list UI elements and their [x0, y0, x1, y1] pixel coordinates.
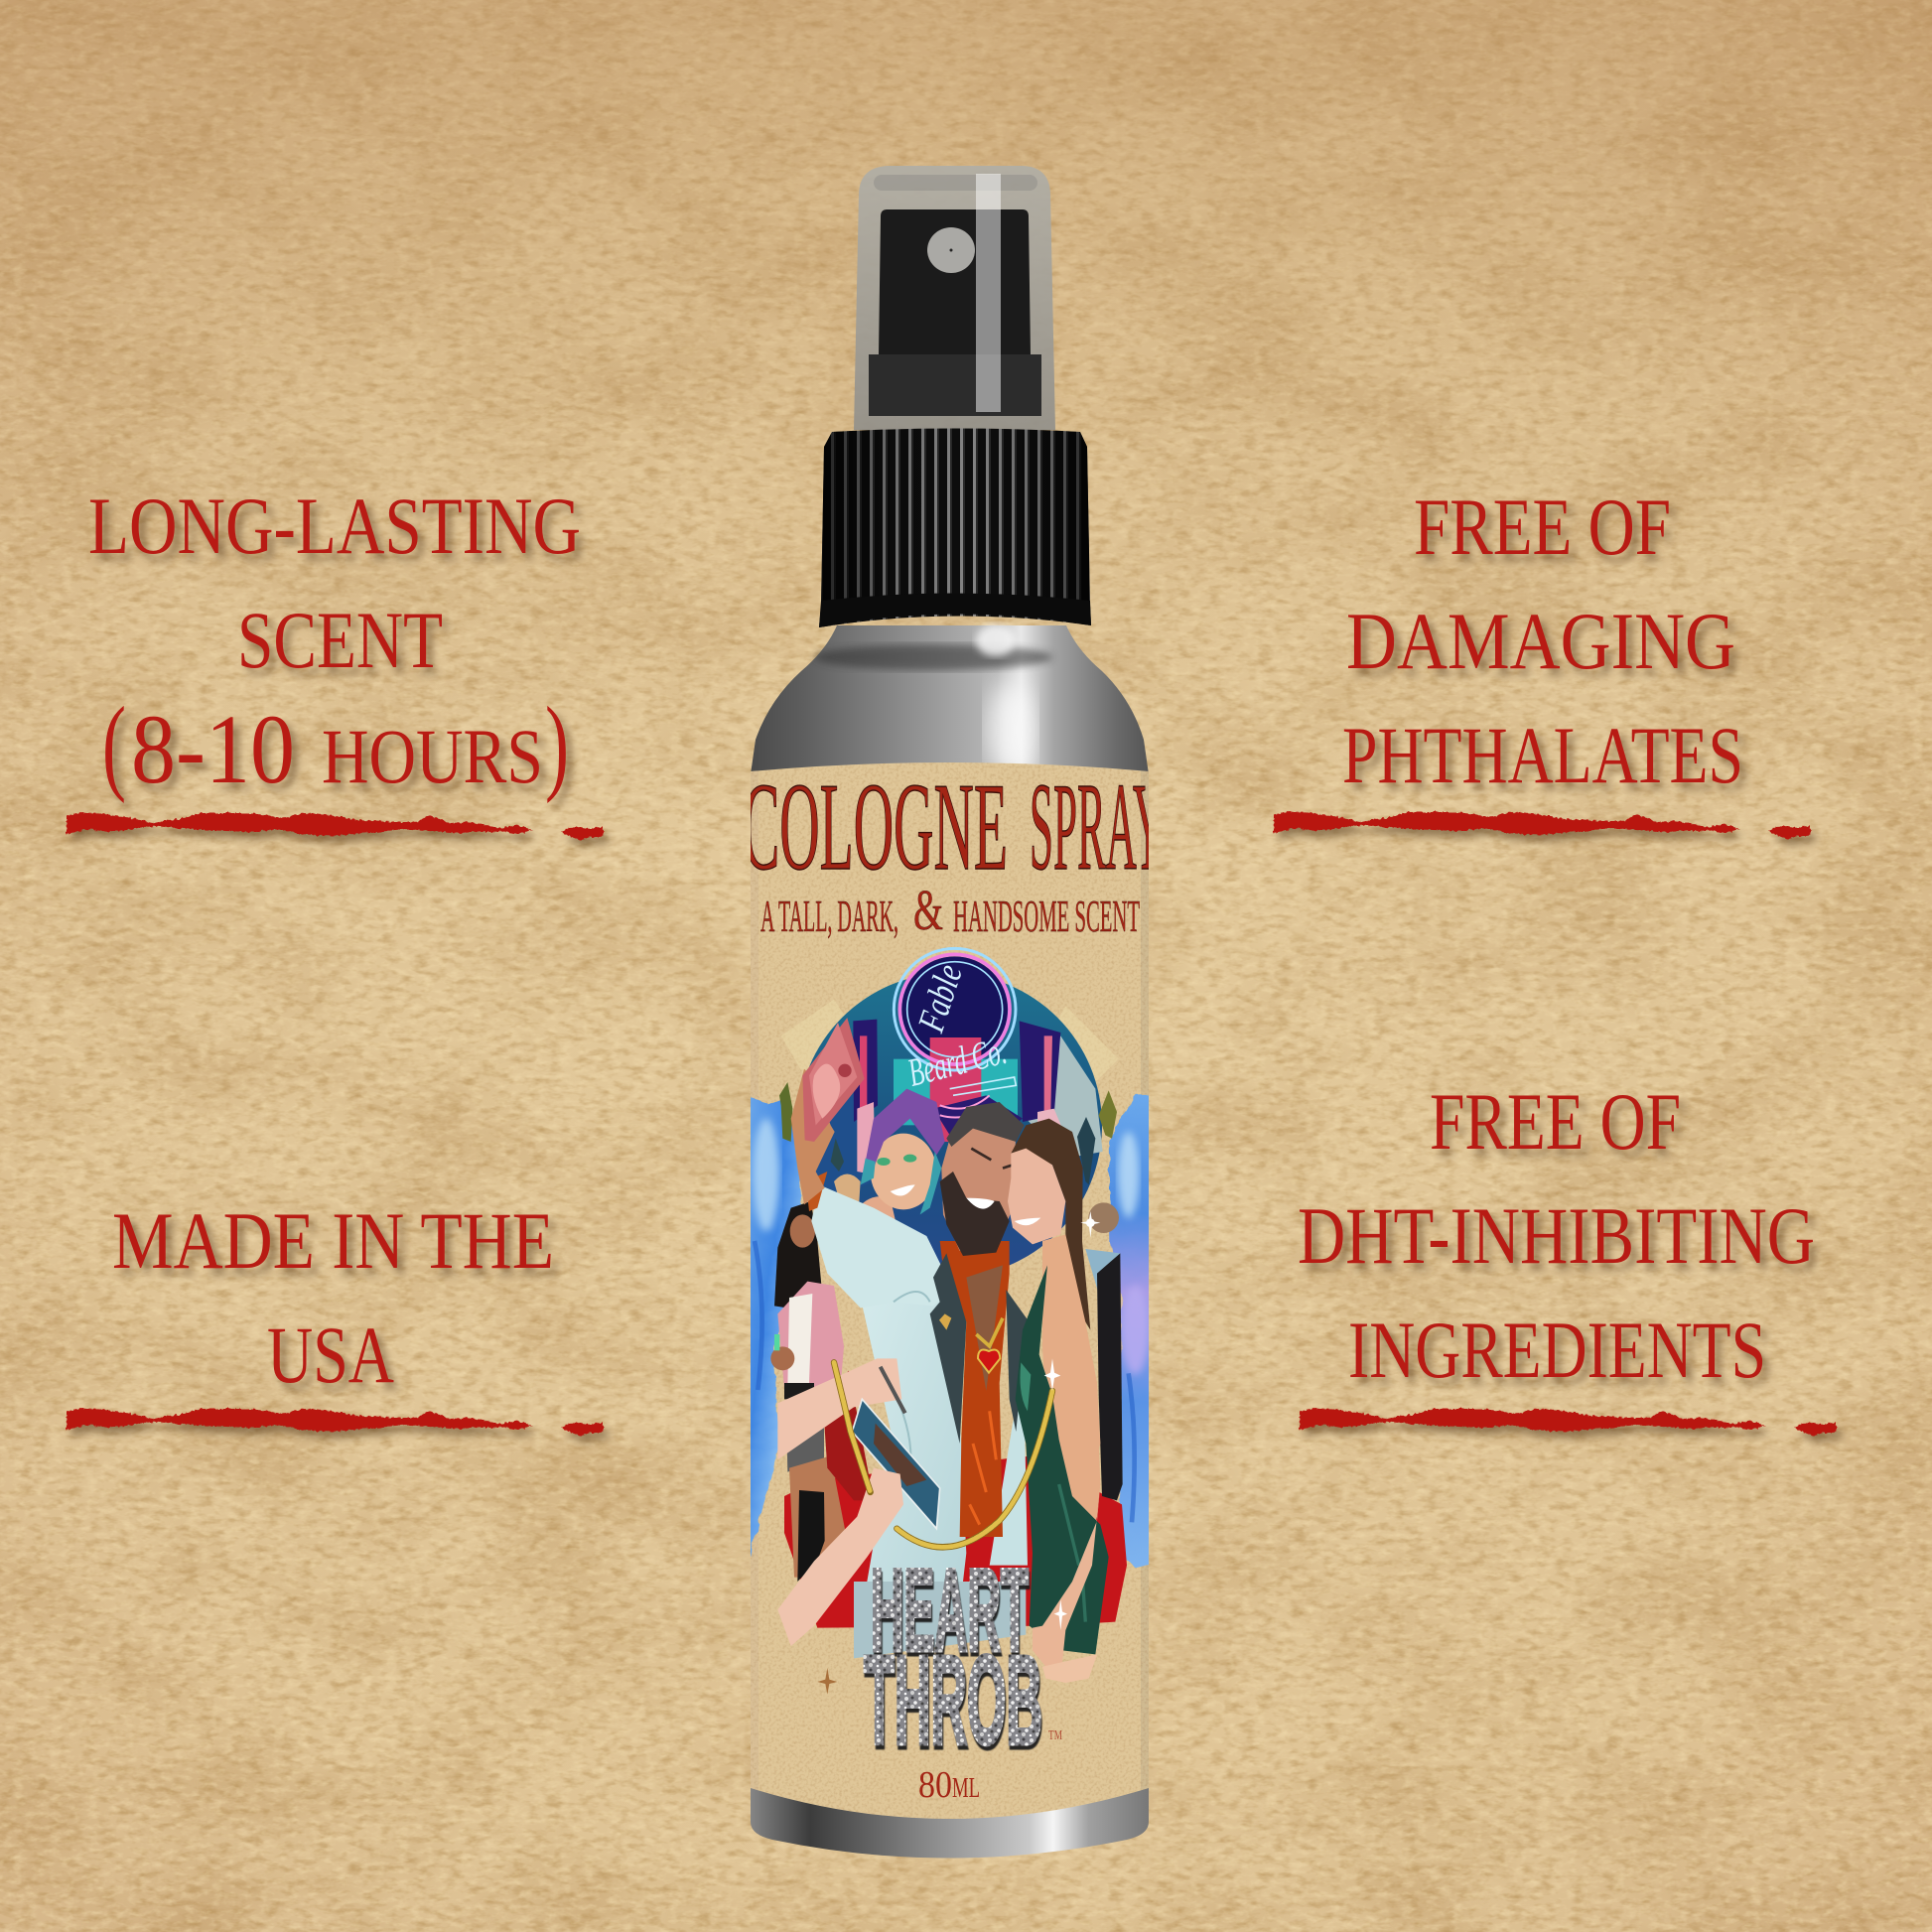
neon sign [894, 948, 1023, 1162]
paper label: HANDSOME SCENT [953, 891, 1140, 941]
cologne spray bottle [743, 166, 1164, 1859]
orange shirt and chest [930, 1241, 1030, 1537]
spotlights [781, 1000, 844, 1072]
feature text: long-lasting scent: HOURS [322, 713, 543, 799]
right background figure [1085, 1202, 1123, 1500]
smartphone [802, 1018, 865, 1142]
feature text: long-lasting scent [88, 481, 581, 804]
selfie hand [791, 1069, 835, 1204]
metal bottom rim [751, 1777, 1149, 1859]
feature text: made in the USA: MADE IN THE [112, 1195, 554, 1286]
man's white jacket [806, 1172, 1035, 1582]
lower arm [777, 1468, 903, 1646]
nozzle [927, 227, 975, 273]
neon sign: Beard Co. [903, 1028, 1011, 1095]
neon sign: Fable [910, 959, 971, 1037]
black pump head [869, 209, 1041, 416]
buildings and rays [1023, 1035, 1103, 1159]
label subtitle: A TALL, DARK, [760, 891, 898, 941]
feature text: free of damaging phthalates: PHTHALATES [1342, 710, 1743, 800]
brush underline: free of damaging phthalates [1274, 811, 1811, 839]
arm with pen [777, 1358, 905, 1459]
brush underline: long-lasting scent [67, 812, 604, 840]
palm trees [779, 1082, 792, 1142]
feature text: made in the USA: USA [267, 1310, 394, 1400]
man's head [940, 1102, 1025, 1256]
text: SPRAY [1030, 759, 1164, 897]
black ribbed collar [819, 429, 1091, 627]
gold chain [834, 1362, 1052, 1547]
feature text: long-lasting scent: ( [102, 686, 126, 804]
woman in green dress [1008, 1119, 1109, 1683]
arch backdrop [797, 973, 1102, 1278]
volume: 80ml: 80 [918, 1764, 952, 1806]
label subtitle [760, 878, 1140, 942]
feature text: free of DHT-inhibiting ingredients: DHT-INHIBITING [1298, 1190, 1815, 1281]
feature text: free of DHT-inhibiting ingredients: FREE OF [1430, 1076, 1681, 1167]
blue ink wash left [751, 1096, 802, 1557]
volume: 80ml [918, 1764, 980, 1806]
blonde figure [834, 1173, 861, 1208]
feature text: free of damaging phthalates [1342, 482, 1743, 800]
sparkles [817, 1211, 1100, 1695]
feature text: long-lasting scent: SCENT [237, 595, 443, 685]
signed photo card [852, 1399, 940, 1529]
paper label: HEART [871, 1545, 1029, 1675]
product name: heart throb [864, 1545, 1042, 1770]
label illustration: nightclub selfie [745, 948, 1155, 1695]
clear spray cap [854, 166, 1055, 430]
feature text: free of damaging phthalates: DAMAGING [1346, 596, 1735, 686]
feature text: long-lasting scent: ) [545, 686, 569, 804]
volume: 80ml: ML [952, 1773, 980, 1804]
paper label: THROB [864, 1630, 1042, 1770]
paper label [751, 762, 1149, 1819]
feature text: long-lasting scent: LONG-LASTING [88, 481, 581, 571]
brush underline: made in the USA [67, 1408, 604, 1436]
feature text: free of DHT-inhibiting ingredients: INGREDIENTS [1348, 1305, 1766, 1395]
label subtitle: & [913, 878, 943, 942]
blue ink wash right [1108, 1094, 1149, 1569]
purple-haired woman [854, 1089, 945, 1241]
brush underline: free of DHT-inhibiting ingredients [1300, 1408, 1837, 1436]
feature text: long-lasting scent: 8-10 [131, 694, 295, 804]
cap highlight [976, 174, 1001, 412]
feature text: free of DHT-inhibiting ingredients [1298, 1076, 1815, 1395]
trouser legs [854, 1582, 1026, 1658]
feature text: made in the USA [112, 1195, 554, 1400]
label title: COLOGNE [743, 759, 1008, 897]
trademark mark: TM [1048, 1728, 1062, 1743]
left woman [770, 1201, 874, 1582]
red wash [784, 1455, 1127, 1628]
feature text: free of damaging phthalates: FREE OF [1414, 482, 1671, 572]
bottle shoulder [751, 625, 1149, 774]
